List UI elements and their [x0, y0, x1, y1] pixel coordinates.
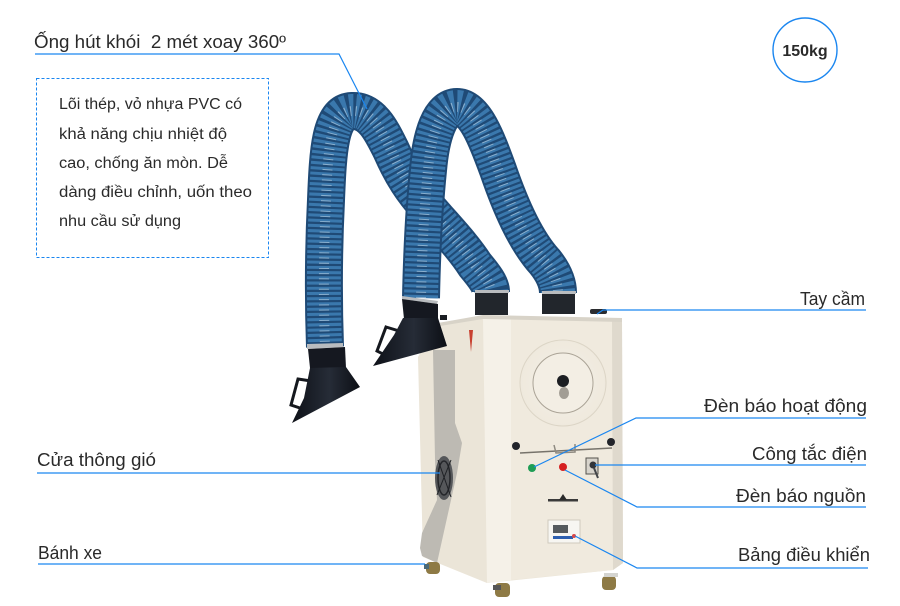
- lock: [469, 330, 473, 352]
- callout: power light: Đèn báo nguồn: [736, 486, 866, 506]
- callout: control panel: [575, 536, 870, 568]
- machine photo: [291, 107, 623, 597]
- callout: hose title: [34, 31, 367, 109]
- left hose: [324, 111, 491, 347]
- wheels: [424, 562, 618, 597]
- control panel: [548, 520, 580, 543]
- callout: hose title: Ống hút khói 2 mét xoay 360º: [34, 31, 286, 52]
- weight badge: [773, 18, 837, 82]
- handle rod and knobs: [512, 438, 615, 453]
- fan: [435, 456, 453, 500]
- green light: [528, 464, 536, 472]
- hose description box: [36, 78, 268, 258]
- callout: control panel: Bảng điều khiển: [738, 545, 870, 565]
- callout: power switch: Công tắc điện: [752, 443, 867, 464]
- weight badge: 150kg: [782, 43, 828, 60]
- hose description box: Lõi thép, vỏ nhựa PVC có: [59, 96, 242, 113]
- right nozzle: [373, 296, 447, 366]
- power switch: [586, 458, 598, 478]
- hose bases: [475, 290, 607, 315]
- callout: activity light: [534, 396, 867, 467]
- cabinet: [418, 315, 623, 583]
- filter disc: [520, 340, 606, 426]
- callout: vent: Cửa thông gió: [37, 450, 156, 470]
- red light: [559, 463, 567, 471]
- callout: wheel: Bánh xe: [38, 543, 102, 563]
- callout: power light: [565, 470, 866, 507]
- right hose: [421, 107, 558, 298]
- callout: handle: Tay cầm: [800, 289, 865, 309]
- hose description box: dàng điều chỉnh, uốn theo: [59, 184, 252, 201]
- callout: activity light: Đèn báo hoạt động: [704, 396, 867, 416]
- hose description box: cao, chống ăn mòn. Dễ: [59, 155, 228, 172]
- logo: [548, 494, 578, 502]
- hose description box: nhu cầu sử dụng: [59, 213, 181, 230]
- left nozzle: [291, 343, 360, 423]
- callout: handle: [597, 289, 866, 314]
- hose description box: khả năng chịu nhiệt độ: [59, 126, 227, 143]
